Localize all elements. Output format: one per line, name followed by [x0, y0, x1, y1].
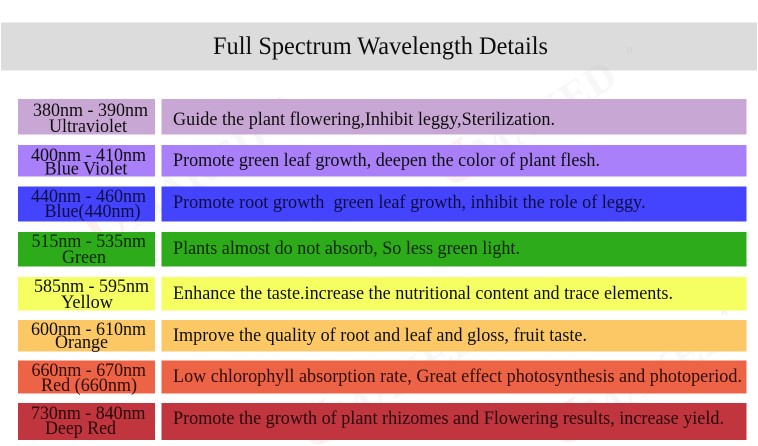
row: blue: Blue(440nm) — [44, 201, 140, 222]
row: yellow: Enhance the taste.increase the nutritional content and trace elements. — [173, 283, 673, 304]
row: deep red: 730nm - 840nm — [31, 403, 146, 424]
watermarks: MAKED — [577, 312, 737, 436]
row: yellow: 585nm - 595nm — [34, 276, 149, 297]
row: ultraviolet: Ultraviolet — [49, 116, 128, 137]
row: deep red: Promote the growth of plant rhizomes and Flowering results, increase yield. — [173, 408, 724, 429]
row: blue: 440nm - 460nm — [31, 186, 146, 207]
row: yellow: Yellow — [61, 292, 113, 313]
row: ultraviolet — [18, 99, 746, 137]
watermarks: MAKED — [115, 114, 275, 238]
row: orange: Improve the quality of root and leaf and gloss, fruit taste. — [173, 325, 587, 346]
row: yellow — [18, 276, 746, 313]
row: orange — [18, 319, 746, 353]
row: ultraviolet: Guide the plant flowering,Inhibit leggy,Sterilization. — [173, 109, 555, 130]
row: green: 515nm - 535nm — [32, 231, 146, 252]
title: Full Spectrum Wavelength Details — [213, 33, 548, 60]
title bar — [1, 22, 757, 70]
watermarks: MAKED — [465, 52, 625, 176]
row: green — [18, 231, 746, 268]
row: blue violet: Promote green leaf growth, deepen the color of plant flesh. — [173, 150, 600, 171]
row: deep red: Deep Red — [45, 418, 116, 439]
row: blue violet — [18, 145, 746, 180]
watermarks: U — [420, 124, 490, 201]
row: green: Green — [62, 247, 106, 268]
row: orange: Orange — [55, 332, 108, 353]
watermarks: R — [721, 306, 729, 318]
row: blue — [18, 186, 746, 222]
row: red — [18, 360, 746, 396]
row: blue violet: 400nm - 410nm — [31, 145, 146, 166]
row: blue violet: Blue Violet — [44, 158, 128, 180]
watermarks: R — [626, 45, 634, 57]
row: orange: 600nm - 610nm — [31, 319, 146, 340]
row: red: Low chlorophyll absorption rate, Great effect photosynthesis and photoperiod. — [173, 366, 742, 387]
row: deep red — [18, 403, 746, 440]
row: green: Plants almost do not absorb, So less green light. — [173, 238, 520, 259]
row: red: Red (660nm) — [41, 375, 137, 396]
row: red: 660nm - 670nm — [32, 360, 146, 381]
row: ultraviolet: 380nm - 390nm — [33, 100, 148, 121]
row: blue: Promote root growth green leaf growth, inhibit the role of leggy. — [173, 192, 646, 213]
watermarks: R — [201, 342, 209, 354]
watermarks: MAKED — [327, 314, 487, 438]
watermarks: R — [277, 95, 285, 107]
watermarks: U — [70, 186, 140, 263]
